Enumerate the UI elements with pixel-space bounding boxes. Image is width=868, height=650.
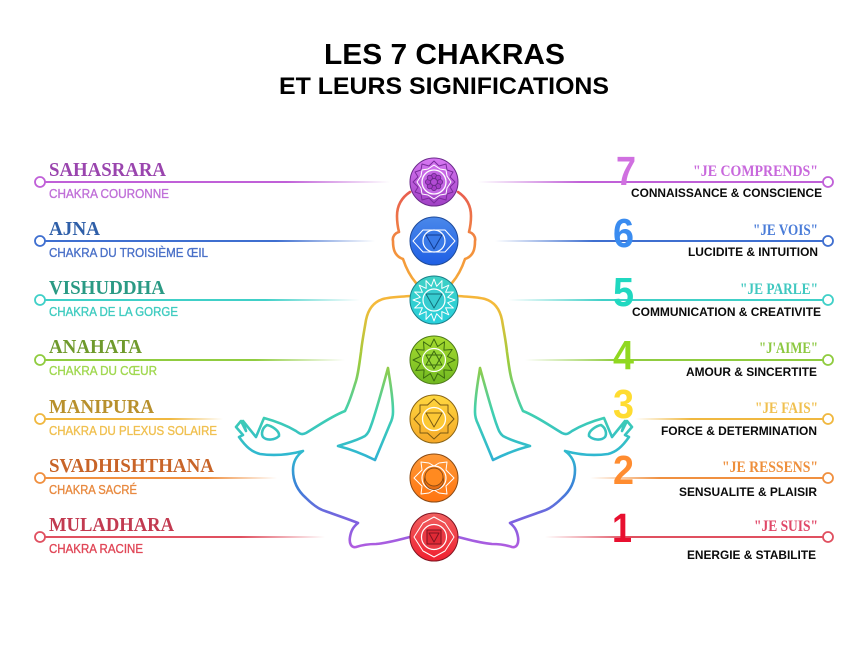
left hand finger loop [262, 425, 279, 440]
row: 3 je fais: 3 [613, 381, 634, 427]
row: 4 j'aime: 4 [613, 332, 634, 378]
row: 2 je ressens [590, 447, 833, 499]
row: Muladhara left label: CHAKRA RACINE [49, 542, 143, 556]
row: 3 je fais [613, 381, 833, 438]
row: Anahata left label: CHAKRA DU CŒUR [49, 364, 157, 378]
row: 3 je fais: "JE FAIS" [755, 400, 818, 417]
row: 3 je fais: FORCE & DETERMINATION [661, 424, 817, 438]
row: Anahata left label: ANAHATA [49, 336, 143, 358]
right inner arm [475, 368, 530, 460]
icon: Vishuddha chakra [410, 276, 458, 324]
body silhouette [236, 192, 632, 547]
row: Manipura left label [35, 396, 223, 438]
row: 1 je suis: ENERGIE & STABILITE [687, 548, 816, 562]
row: 1 je suis: "JE SUIS" [754, 518, 818, 535]
row: 6 je vois: LUCIDITE & INTUITION [688, 245, 818, 259]
row: 1 je suis: 1 [612, 505, 632, 551]
row: 1 je suis [545, 505, 833, 562]
row: Manipura left label: CHAKRA DU PLEXUS SOLAIRE [49, 424, 217, 438]
row: Svadhishthana left label: SVADHISHTHANA [49, 455, 215, 477]
row: Vishuddha left label: VISHUDDHA [49, 277, 166, 299]
title: LES 7 CHAKRAS [324, 39, 565, 71]
icon: Svadhishthana chakra [410, 454, 458, 502]
row: 2 je ressens: "JE RESSENS" [722, 459, 818, 476]
row: 5 je parle: "JE PARLE" [740, 281, 818, 298]
row: 4 j'aime [525, 332, 833, 379]
row: 5 je parle [508, 269, 833, 319]
row: Manipura left label: MANIPURA [49, 396, 155, 418]
row: 2 je ressens: SENSUALITE & PLAISIR [679, 485, 817, 499]
title [279, 39, 609, 100]
row: 7 je comprends: 7 [616, 148, 636, 194]
row: 4 j'aime: "J'AIME" [759, 340, 818, 357]
icon: Anahata chakra [410, 336, 458, 384]
row: 5 je parle: COMMUNICATION & CREATIVITE [632, 305, 821, 319]
row: 6 je vois: "JE VOIS" [753, 222, 818, 239]
row: Sahasrara left label [35, 159, 390, 201]
row: 2 je ressens: 2 [613, 447, 634, 493]
icon: Muladhara chakra [410, 513, 458, 561]
row: Muladhara left label [35, 514, 325, 556]
icon: Ajna chakra [410, 217, 458, 265]
title: ET LEURS SIGNIFICATIONS [279, 73, 609, 100]
row: Ajna left label: CHAKRA DU TROISIÈME ŒIL [49, 245, 208, 260]
row: Ajna left label [35, 218, 375, 260]
row: Muladhara left label: MULADHARA [49, 514, 175, 536]
row: Ajna left label: AJNA [49, 218, 101, 240]
row: 5 je parle: 5 [613, 269, 634, 315]
left inner arm [338, 368, 393, 460]
row: 6 je vois: 6 [613, 210, 634, 256]
row: Vishuddha left label: CHAKRA DE LA GORGE [49, 305, 178, 319]
row: 7 je comprends: "JE COMPRENDS" [693, 163, 818, 180]
row: 6 je vois [495, 210, 833, 259]
row: Anahata left label [35, 336, 345, 378]
row: Sahasrara left label: SAHASRARA [49, 159, 167, 181]
row: Svadhishthana left label [35, 455, 277, 497]
row: Svadhishthana left label: CHAKRA SACRÉ [49, 482, 137, 497]
row: 4 j'aime: AMOUR & SINCERTITE [686, 365, 817, 379]
right hand finger loop [589, 425, 606, 440]
row: Vishuddha left label [35, 277, 360, 319]
icon: Manipura chakra [410, 395, 458, 443]
row: 7 je comprends: CONNAISSANCE & CONSCIENCE [631, 186, 822, 200]
row: Sahasrara left label: CHAKRA COURONNE [49, 187, 169, 201]
row: 7 je comprends [478, 148, 833, 200]
icon: Sahasrara chakra [410, 158, 458, 206]
